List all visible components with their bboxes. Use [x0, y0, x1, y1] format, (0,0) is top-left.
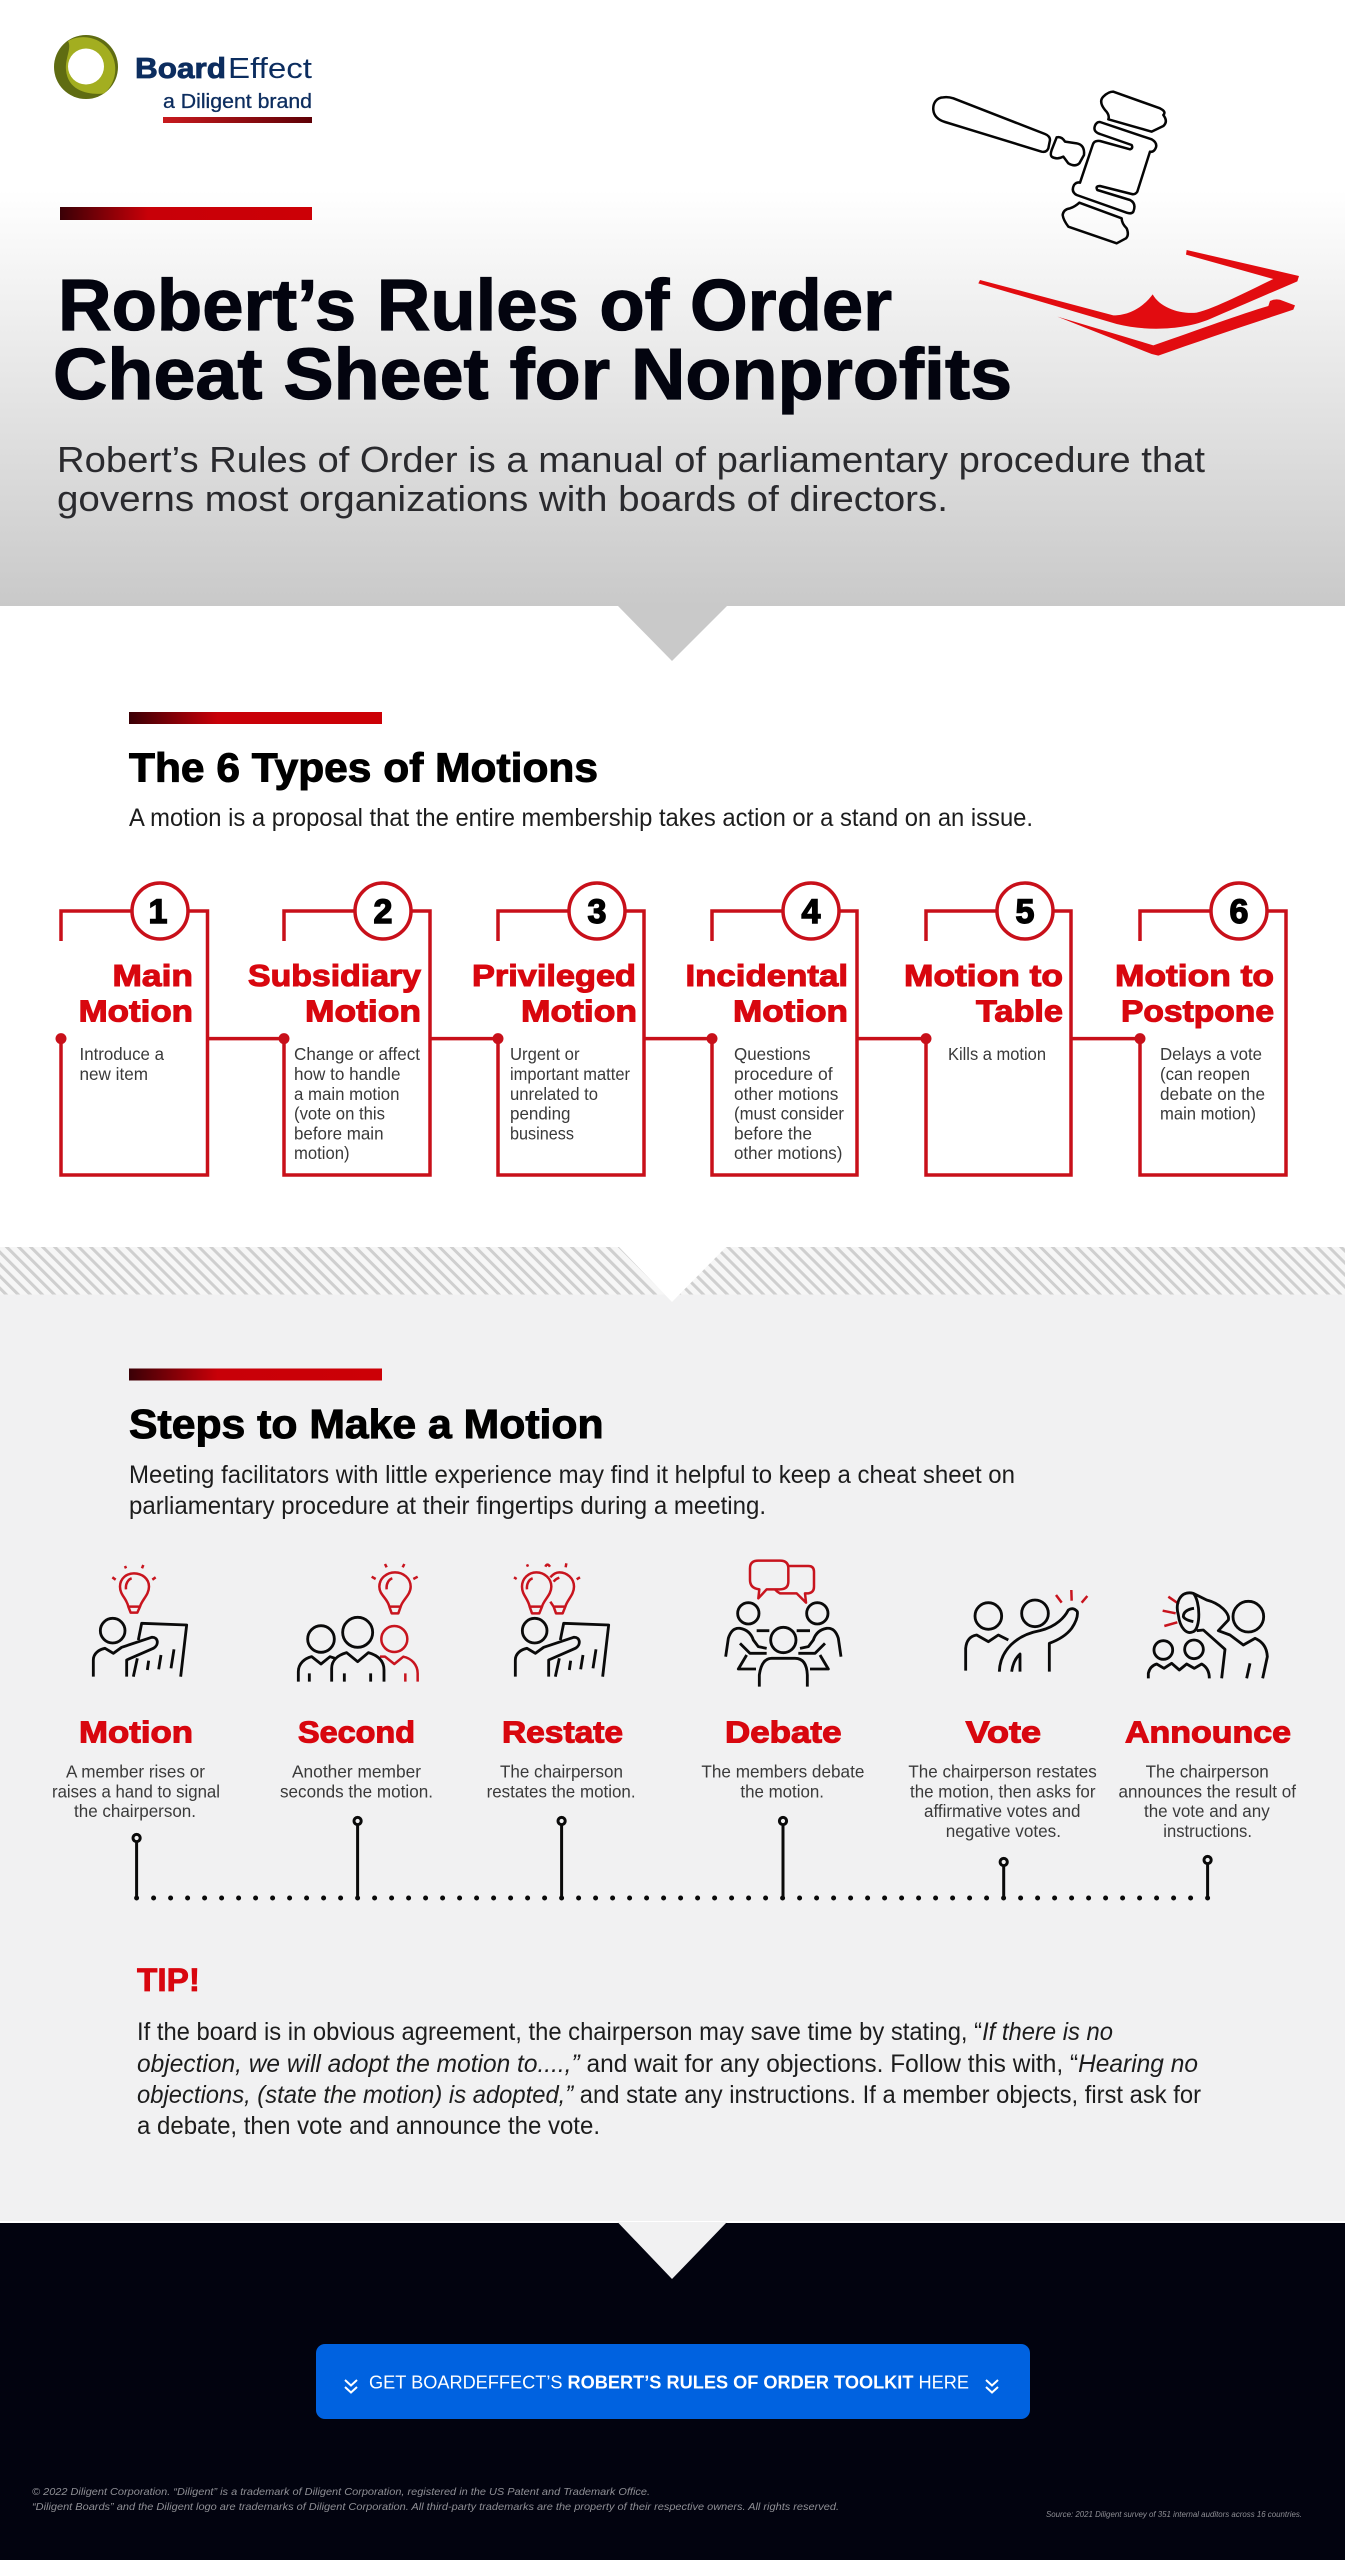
intro text	[129, 1461, 1015, 1520]
panel: footer	[0, 2221, 1345, 2560]
card 3: privileged motion: business	[510, 1124, 574, 1144]
connectors between cards	[208, 1037, 1140, 1040]
card 2: subsidiary motion	[248, 883, 430, 1175]
card 3: privileged motion: Urgent or	[510, 1044, 580, 1064]
intro text: A motion is a proposal that the entire membership takes action or a stand on an issue.	[129, 804, 1033, 832]
card 4: incidental motion: before the	[734, 1124, 812, 1144]
card 6: motion to postpone: (can reopen	[1160, 1064, 1250, 1084]
step: vote: the motion, then asks for	[910, 1782, 1096, 1802]
step: motion	[52, 1714, 220, 1821]
icon: restate presenter with two bulbs	[514, 1563, 609, 1677]
card 2: subsidiary motion: motion)	[294, 1143, 350, 1163]
accent bar	[129, 1368, 382, 1380]
card 6: motion to postpone: Postpone	[1121, 994, 1274, 1029]
card 2: subsidiary motion: Subsidiary	[248, 958, 422, 993]
step: motion: raises a hand to signal	[52, 1782, 220, 1802]
step: motion: A member rises or	[66, 1762, 205, 1782]
card 1: main motion: Motion	[79, 994, 193, 1029]
logo: BoardEffect	[54, 35, 312, 123]
icon: second, three people with bulb	[298, 1564, 418, 1682]
step: vote	[908, 1714, 1097, 1841]
card 2: subsidiary motion: 2	[374, 893, 392, 931]
intro text: parliamentary procedure at their fingertips during a meeting.	[129, 1492, 766, 1520]
call to action button: GET BOARDEFFECT’S ROBERT’S RULES OF ORDER TOOLKIT HERE	[369, 2372, 969, 2392]
icon: announce, megaphone	[1148, 1593, 1267, 1678]
card 5: motion to table: Motion to	[904, 958, 1063, 993]
step: vote: negative votes.	[946, 1821, 1061, 1841]
timeline	[133, 1817, 1211, 1898]
card 3: privileged motion: pending	[510, 1104, 570, 1124]
header pointer	[618, 606, 727, 661]
step: debate: Debate	[725, 1714, 842, 1750]
icon: motion presenter with bulb	[93, 1565, 187, 1677]
step: debate: the motion.	[740, 1782, 824, 1802]
legal text: © 2022 Diligent Corporation. “Diligent” is a trademark of Diligent Corporation, registered in the US Patent and Trademark Office.	[32, 2486, 650, 2498]
card 4: incidental motion: (must consider	[734, 1104, 844, 1124]
title: Robert’s Rules of Order	[58, 266, 892, 346]
card 1: main motion: Main	[112, 958, 193, 993]
step: announce: the vote and any	[1144, 1801, 1270, 1821]
step: restate	[487, 1714, 636, 1802]
card 6: motion to postpone: Motion to	[1115, 958, 1274, 993]
card 3: privileged motion: unrelated to	[510, 1084, 598, 1104]
accent bar	[60, 207, 312, 220]
step: restate: Restate	[502, 1714, 623, 1750]
subtitle	[57, 439, 1205, 519]
tip heading: TIP!	[137, 1962, 200, 1998]
card 4: incidental motion: procedure of	[734, 1064, 833, 1084]
icon: gavel	[933, 92, 1166, 243]
tip text: a debate, then vote and announce the vote.	[137, 2112, 600, 2140]
card 1: main motion: new item	[80, 1064, 148, 1084]
step: vote: The chairperson restates	[908, 1762, 1097, 1782]
card 6: motion to postpone	[1115, 883, 1286, 1175]
card 1: main motion	[56, 883, 208, 1175]
step: second: Another member	[292, 1762, 421, 1782]
intro text: Meeting facilitators with little experience may find it helpful to keep a cheat sheet on	[129, 1461, 1015, 1489]
card 5: motion to table: Table	[976, 994, 1063, 1029]
logo: BoardEffect: Board	[135, 53, 226, 85]
card 2: subsidiary motion: (vote on this	[294, 1104, 385, 1124]
card 2: subsidiary motion: Motion	[305, 994, 421, 1029]
tip text	[137, 2018, 1201, 2140]
section pointer	[618, 1246, 727, 1302]
card 2: subsidiary motion: a main motion	[294, 1084, 400, 1104]
logo: BoardEffect: a Diligent brand	[163, 91, 312, 113]
card 2: subsidiary motion: before main	[294, 1124, 384, 1144]
source note: Source: 2021 Diligent survey of 351 internal auditors across 16 countries.	[1046, 2510, 1302, 2519]
card 2: subsidiary motion: Change or affect	[294, 1044, 420, 1064]
icon: vote, raised hand	[966, 1590, 1087, 1672]
tip text: If the board is in obvious agreement, the chairperson may save time by stating, “If there is no	[137, 2018, 1113, 2046]
legal text	[32, 2486, 839, 2513]
card 3: privileged motion: 3	[588, 893, 606, 931]
subtitle: Robert’s Rules of Order is a manual of parliamentary procedure that	[57, 439, 1205, 480]
step: vote: Vote	[966, 1714, 1041, 1750]
card 5: motion to table	[904, 883, 1071, 1175]
icon: red book	[978, 250, 1299, 356]
legal text: “Diligent Boards” and the Diligent logo are trademarks of Diligent Corporation. All third-party trademarks are the property of their respective owners. All rights reserved.	[32, 2501, 839, 2513]
call to action button	[316, 2344, 1030, 2419]
card 4: incidental motion: Motion	[733, 994, 848, 1029]
card 4: incidental motion	[686, 883, 857, 1175]
step: announce: The chairperson	[1146, 1762, 1269, 1782]
card 1: main motion: 1	[149, 893, 167, 931]
card 6: motion to postpone: 6	[1230, 893, 1248, 931]
card 3: privileged motion: important matter	[510, 1064, 630, 1084]
card 4: incidental motion: 4	[802, 893, 821, 931]
step: restate: restates the motion.	[487, 1782, 636, 1802]
step: announce	[1118, 1714, 1296, 1841]
footer pointer	[618, 2222, 727, 2279]
card 3: privileged motion: Motion	[521, 994, 637, 1029]
accent bar	[129, 712, 382, 724]
icon: debate, people at table with speech bubbles	[726, 1561, 841, 1687]
card 4: incidental motion: Incidental	[686, 958, 848, 993]
step: announce: announces the result of	[1118, 1782, 1296, 1802]
step: motion: Motion	[79, 1714, 193, 1750]
card 4: incidental motion: other motions	[734, 1084, 839, 1104]
card 3: privileged motion	[472, 883, 644, 1175]
heading: The 6 Types of Motions	[129, 744, 598, 790]
logo: BoardEffect: Effect	[228, 53, 312, 85]
card 6: motion to postpone: debate on the	[1160, 1084, 1265, 1104]
step: debate	[701, 1714, 864, 1802]
card 5: motion to table: 5	[1016, 893, 1034, 931]
panel: the 6 types of motions	[56, 712, 1286, 1175]
title	[53, 266, 1012, 415]
card 5: motion to table: Kills a motion	[948, 1044, 1046, 1064]
step: second: Second	[298, 1714, 415, 1750]
step: second: seconds the motion.	[280, 1782, 433, 1802]
card 3: privileged motion: Privileged	[472, 958, 636, 993]
step: debate: The members debate	[701, 1762, 864, 1782]
step: vote: affirmative votes and	[924, 1801, 1080, 1821]
card 4: incidental motion: other motions)	[734, 1143, 842, 1163]
panel: steps to make a motion	[0, 1246, 1345, 2222]
card 2: subsidiary motion: how to handle	[294, 1064, 400, 1084]
subtitle: governs most organizations with boards of directors.	[57, 478, 948, 519]
tip text: objections, (state the motion) is adopted,” and state any instructions. If a member objects, first ask for	[137, 2081, 1201, 2109]
card 4: incidental motion: Questions	[734, 1044, 811, 1064]
card 1: main motion: Introduce a	[80, 1044, 164, 1064]
heading: Steps to Make a Motion	[129, 1401, 604, 1447]
step: announce: instructions.	[1163, 1821, 1252, 1841]
step: announce: Announce	[1125, 1714, 1291, 1750]
card 6: motion to postpone: Delays a vote	[1160, 1044, 1262, 1064]
tip text: objection, we will adopt the motion to....,” and wait for any objections. Follow this with, “Hearing no	[137, 2050, 1198, 2078]
step: restate: The chairperson	[500, 1762, 623, 1782]
panel: header	[0, 0, 1345, 661]
card 6: motion to postpone: main motion)	[1160, 1104, 1256, 1124]
title: Cheat Sheet for Nonprofits	[53, 335, 1012, 415]
step: motion: the chairperson.	[74, 1801, 196, 1821]
step: second	[280, 1714, 433, 1802]
